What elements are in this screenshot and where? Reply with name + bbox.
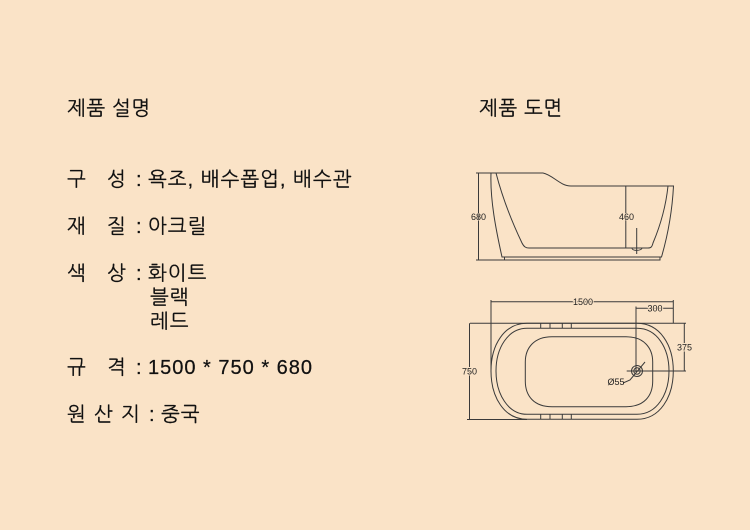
spec: origin: 원 [67,404,87,426]
dimension: drain diameter leader [623,362,645,383]
spec: dimensions: 격 [107,357,127,379]
label: overall depth: 750 [462,366,477,376]
spec: composition: 욕조, 배수폽업, 배수관 [148,169,352,191]
spec: colours: 색 [67,263,87,285]
top view: drain circles [632,366,642,376]
dimension: drain offset line [636,306,673,372]
dimension: overall depth line [467,323,527,420]
heading: product drawing: 제품 도면 [479,98,563,120]
top view: outer rim [491,323,673,419]
spec: origin [67,404,201,426]
dimension: half width line [470,323,686,371]
top view: second rim [496,328,669,414]
side view: tub inner basin [496,173,668,248]
label: drain offset: 300 [648,304,663,314]
side view: base [504,257,660,260]
spec: dimensions [67,357,313,379]
dimension: basin depth line [624,186,628,248]
side view: tub outer shell [478,173,674,257]
spec: composition: : [136,169,143,191]
spec: colours: 화이트 [148,263,207,285]
spec: dimensions: 1500 * 750 * 680 [148,357,313,379]
spec: colours: : [136,263,143,285]
spec: colours [67,263,207,333]
heading: product description: 제품 설명 [67,98,151,120]
spec: origin: 지 [121,404,141,426]
label: basin depth: 460 [619,212,634,222]
spec: composition: 성 [107,169,127,191]
side view: drain [632,228,642,254]
spec: colours: 레드 [150,311,190,333]
spec: origin: : [149,404,156,426]
top view: rim marks [541,323,571,419]
spec: origin: 산 [94,404,114,426]
dimension: overall width line [491,300,673,372]
label: overall width: 1500 [573,297,593,307]
top view: inner basin [525,337,653,407]
spec: material: 재 [67,216,87,238]
spec: material [67,216,207,238]
spec: dimensions: 규 [67,357,87,379]
label: overall height: 680 [471,212,486,222]
spec: colours: 블랙 [150,287,190,309]
spec: material: : [136,216,143,238]
spec: material: 질 [107,216,127,238]
spec: material: 아크릴 [148,216,207,238]
spec: composition: 구 [67,169,87,191]
spec: origin: 중국 [161,404,201,426]
label: drain diameter: Ø55 [608,377,625,387]
label: half width: 375 [677,342,692,352]
spec: dimensions: : [136,357,143,379]
dimension: overall height line [476,173,504,260]
spec: colours: 상 [107,263,127,285]
